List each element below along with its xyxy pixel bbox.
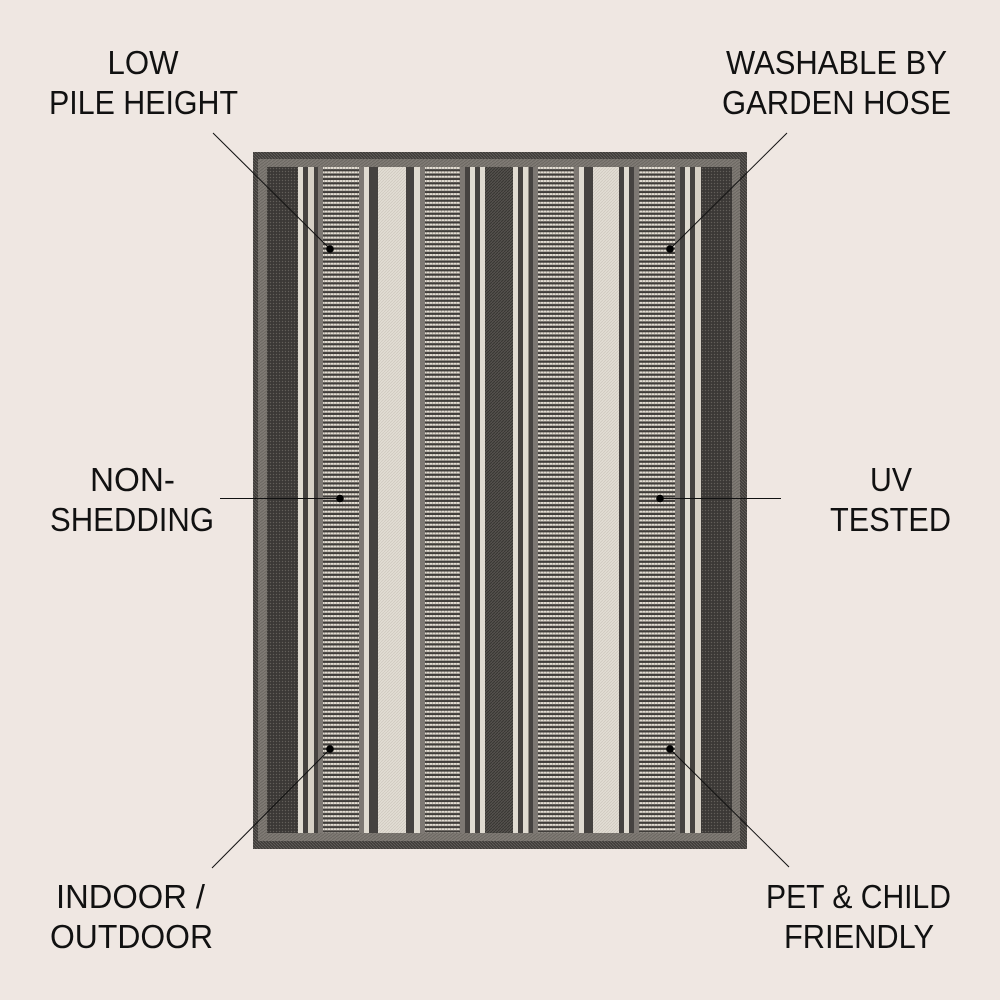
callout: pet and child friendly [666, 745, 951, 955]
callout: pet and child friendly: FRIENDLY [784, 918, 934, 955]
callout: low pile height: PILE HEIGHT [49, 84, 238, 121]
callout: non-shedding [50, 461, 344, 538]
callout: pet and child friendly: PET & CHILD [766, 878, 951, 915]
callout: indoor / outdoor: OUTDOOR [50, 918, 213, 955]
callout: non-shedding: SHEDDING [50, 501, 214, 538]
callout: low pile height: LOW [108, 44, 179, 81]
callout: UV tested: UV [870, 461, 912, 498]
callout: washable by garden hose [666, 44, 951, 253]
callout: non-shedding: NON- [90, 461, 175, 498]
panel: striped rug [253, 152, 747, 849]
callout: washable by garden hose: GARDEN HOSE [722, 84, 951, 121]
rug stripes [298, 167, 701, 833]
callout: indoor / outdoor: INDOOR / [56, 878, 206, 915]
callout: low pile height [49, 44, 334, 253]
callout: UV tested: TESTED [830, 501, 951, 538]
callout: indoor / outdoor [50, 745, 334, 955]
callout: UV tested [656, 461, 951, 538]
callout: washable by garden hose: WASHABLE BY [726, 44, 947, 81]
